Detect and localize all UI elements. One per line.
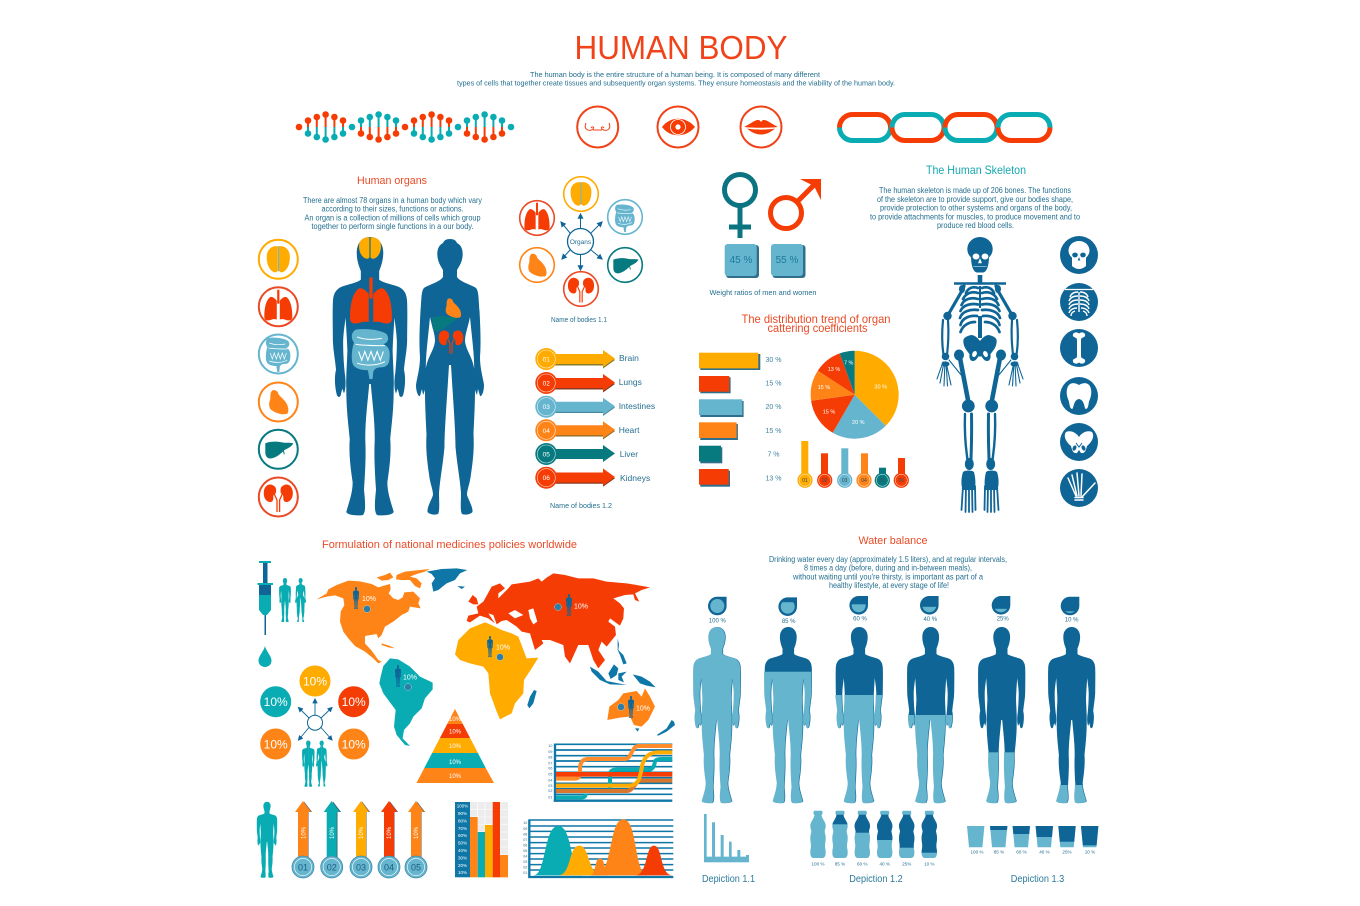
bar percentages: 15 % [766, 428, 781, 435]
icon: lips [740, 106, 782, 148]
radial percentage circles: 10% [264, 738, 288, 752]
water balance description: without waiting until you're thirsty, is important as part of a [792, 572, 984, 582]
depiction 1.2 bottles: 60 % [857, 862, 868, 866]
map marker: asia: 10% [574, 604, 588, 610]
depiction 1.3 cups: 40 % [1039, 850, 1050, 854]
caption: name of bodies 1.2: Name of bodies 1.2 [550, 503, 612, 510]
depiction 1.3 cups: 25% [1062, 850, 1072, 854]
depiction 1.2 bottles: 40 % [879, 862, 890, 866]
depiction 1.3 cups: 60 % [1016, 850, 1027, 854]
skeleton description: The human skeleton is made up of 206 bones. The functions [879, 186, 1071, 195]
depiction 1.3 cups [967, 826, 1099, 854]
organs description: according to their sizes, functions or actions. [322, 205, 464, 214]
intro text: The human body is the entire structure of a human being. It is composed of many different [530, 70, 821, 79]
female figure with organs [416, 239, 484, 515]
map marker: africa [487, 636, 510, 660]
standing teal figure [257, 802, 277, 878]
pyramid chart: 10% [449, 760, 462, 766]
thermometer bars [797, 441, 909, 488]
teal people pair [279, 578, 306, 622]
radial percentage circles: 10% [303, 674, 327, 688]
bar percentages: 7 % [767, 452, 780, 458]
stream line chart: 09 [548, 750, 552, 754]
water drop indicators: 85 % [782, 619, 796, 625]
water balance description: Drinking water every day (approximately 1.5 liters), and at regular intervals, [769, 555, 1007, 564]
stream line chart: 02 [548, 789, 552, 793]
pie chart: 7 % [844, 360, 854, 366]
heading: the human skeleton: The Human Skeleton [926, 163, 1026, 177]
stream line chart: 04 [548, 778, 552, 782]
radial percentage circles: 10% [342, 695, 366, 709]
map marker: australia: 10% [636, 706, 650, 712]
pyramid chart: 10% [449, 744, 462, 750]
stream line chart: 07 [548, 761, 552, 765]
eurasia, africa and oceania [455, 573, 675, 736]
bar percentages: 30 % [766, 357, 781, 364]
mountain area chart: 02 [523, 866, 527, 870]
arrow list of organs: 02 [543, 380, 550, 388]
icon: pelvis [1060, 423, 1098, 461]
mountain area chart: 10 [523, 821, 527, 825]
depiction 1.2 label: Depiction 1.2 [849, 874, 903, 885]
water balance description: healthy lifestyle, at every stage of life! [829, 581, 949, 590]
pie chart: 15 % [823, 410, 835, 416]
pie chart: 13 % [828, 367, 840, 373]
percentage bar chart: 80% [458, 818, 467, 823]
box: 55 percent: 55 % [776, 255, 799, 266]
panel: national medicines policies [257, 539, 675, 878]
arrow list of organs: Intestines [619, 401, 655, 411]
depiction 1.2 bottles: 85 % [835, 862, 845, 866]
skeleton icons column [1060, 236, 1098, 507]
icon: rib cage [1060, 283, 1098, 321]
thermometer bars: 04 [861, 478, 867, 484]
north america [317, 568, 467, 663]
mountain area chart: 09 [523, 827, 527, 831]
panel: human organs [259, 175, 484, 516]
male figure with organs [333, 237, 407, 515]
mountain area chart [523, 819, 673, 877]
percentage bar chart: 30% [458, 855, 467, 860]
arrow list of organs: 01 [543, 356, 550, 364]
heading: human organs: Human organs [357, 175, 427, 187]
organs description [303, 196, 482, 231]
stream line chart: 05 [548, 773, 552, 777]
bar percentages: 13 % [766, 476, 781, 482]
upward arrows chart: 10% [387, 826, 393, 839]
water drop indicators [708, 596, 1079, 625]
intro text: types of cells that together create tissues and subsequently organ systems. They ensure homeostasis and the viability of the human body. [457, 78, 895, 88]
depiction 1.2 bottles: 100 % [811, 862, 825, 866]
icon: hand bones [1060, 469, 1098, 507]
stream line chart: 01 [548, 795, 552, 799]
pie chart: 20 % [852, 420, 865, 426]
bar percentages [766, 357, 781, 482]
bar percentages: 15 % [766, 380, 781, 388]
skeleton description: provide protection to other systems and organs of the body, [880, 204, 1072, 212]
water drop indicators: 40 % [923, 617, 938, 623]
depiction 1.2 bottles: 10 % [924, 862, 935, 866]
icon: syringe [258, 561, 273, 635]
upward arrows chart: 10% [359, 826, 365, 839]
organs description: There are almost 78 organs in a human body which vary [303, 196, 482, 205]
thermometer bars: 05 [880, 478, 885, 484]
percentage bar chart: 40% [458, 848, 467, 853]
map marker: africa: 10% [496, 644, 510, 652]
pie chart: 15 % [818, 385, 830, 391]
mountain area chart: 03 [523, 860, 527, 864]
thermometer bars: 06 [899, 478, 904, 484]
south america [379, 658, 433, 746]
depiction 1.3 label: Depiction 1.3 [1011, 874, 1065, 885]
depiction 1.2 bottles [810, 811, 938, 866]
map marker: south america: 10% [403, 674, 417, 682]
body water figures [687, 627, 1101, 807]
water drop indicators: 60 % [853, 616, 867, 622]
water balance description [769, 555, 1007, 590]
skeleton description: to provide attachments for muscles, to produce movement and to [870, 212, 1080, 221]
arrow list of organs: Brain [619, 353, 639, 363]
thermometer bars: 03 [842, 478, 848, 484]
water drop indicators: 10 % [1065, 618, 1079, 624]
mountain area chart: 04 [523, 855, 527, 859]
water drop indicators: 100 % [709, 618, 726, 624]
bar percentages: 20 % [766, 404, 781, 411]
radial percentage circles [260, 666, 369, 787]
panel: water balance [687, 535, 1101, 885]
icon: tooth [1060, 377, 1098, 415]
skeleton description: produce red blood cells. [937, 221, 1014, 230]
heading: formulation: Formulation of national medicines policies worldwide [322, 539, 577, 551]
map marker: south america [395, 665, 417, 690]
icon: skull [1060, 236, 1098, 274]
icon: female symbol [724, 174, 756, 238]
radial organs diagram [520, 177, 642, 306]
upward arrows chart: 03 [356, 862, 366, 872]
percentage bar chart: 50% [458, 841, 467, 846]
mountain area chart: 05 [523, 849, 527, 853]
stream line chart: 08 [548, 756, 552, 760]
gender symbols and weight ratios [710, 174, 821, 297]
skeleton description [870, 186, 1080, 230]
world map [317, 568, 675, 746]
icon: eye [658, 106, 698, 148]
map marker: australia [618, 696, 650, 718]
heading: distribution trend: The distribution trend of organ [742, 312, 890, 326]
percentage bar chart: 70% [458, 826, 467, 831]
depiction 1.3 cups: 100 % [970, 850, 984, 854]
mountain area chart: 06 [523, 844, 527, 848]
panel: human skeleton [870, 163, 1098, 512]
caption: weight ratios: Weight ratios of men and women [710, 288, 816, 297]
radial percentage circles: 10% [342, 738, 366, 752]
intro text [457, 70, 895, 88]
arrow list of organs: 06 [543, 475, 550, 482]
upward arrows chart: 10% [302, 826, 308, 839]
stream line chart: 10 [548, 744, 552, 748]
map marker: asia [555, 594, 588, 616]
arrow list of organs: 03 [543, 404, 550, 411]
arrow list of organs: 05 [543, 452, 550, 458]
depiction 1.3 cups: 85 % [994, 850, 1004, 854]
upward arrows chart: 10% [330, 826, 336, 839]
upward arrows chart: 04 [384, 862, 394, 872]
icon column: organs [259, 240, 298, 516]
upward arrows chart: 02 [327, 862, 337, 872]
percentage bar chart: 100% [457, 804, 468, 808]
percentage bar chart: 90% [458, 811, 467, 816]
water drop indicators: 25% [997, 616, 1009, 622]
heading: distribution trend: cattering coefficients [768, 321, 868, 335]
pyramid chart: 10% [449, 774, 462, 780]
mountain area chart: 08 [523, 832, 527, 836]
mountain area chart: 01 [523, 871, 527, 875]
pyramid chart: 10% [449, 717, 462, 723]
depiction 1.1 chart [704, 814, 749, 862]
percentage bar chart: 60% [458, 833, 467, 838]
map marker: north america: 10% [362, 596, 376, 603]
heading: water balance: Water balance [858, 535, 928, 547]
arrow list of organs: Kidneys [620, 473, 650, 483]
icon: nose [577, 106, 618, 148]
stream line chart [548, 744, 672, 802]
horizontal bars [699, 353, 760, 487]
chain [840, 114, 1050, 140]
stream line chart: 06 [548, 767, 552, 771]
organs description: together to perform single functions in a our body. [312, 222, 474, 231]
percentage bar chart: 20% [458, 863, 467, 868]
icon: water drop [258, 646, 272, 667]
pyramid chart: 10% [449, 730, 462, 736]
upward arrows chart: 05 [411, 862, 421, 872]
thermometer bars: 01 [802, 478, 808, 484]
percentage bar chart [455, 802, 508, 877]
arrow list of organs: Lungs [619, 377, 642, 387]
arrow list of organs: 04 [543, 428, 550, 435]
pie chart: 30 % [874, 384, 887, 390]
icon: bone [1060, 329, 1098, 367]
upward arrows chart: 10% [414, 826, 420, 839]
icon: male symbol [770, 179, 821, 228]
arrow list of organs: Liver [620, 449, 638, 459]
box: 45 percent: 45 % [730, 255, 753, 266]
percentage bar chart: 10% [458, 870, 467, 875]
arrow list of organs [535, 348, 655, 489]
depiction 1.1 label: Depiction 1.1 [702, 874, 755, 885]
upward arrows chart: 01 [298, 862, 308, 872]
heading: distribution trend [742, 312, 890, 335]
panel: distribution trend [699, 312, 909, 488]
organs description: An organ is a collection of millions of cells which group [304, 213, 481, 222]
pyramid chart [416, 709, 494, 783]
title: HUMAN BODY [574, 29, 788, 66]
map marker: north america [353, 587, 376, 612]
upward arrows chart [292, 801, 427, 878]
dna helix [296, 111, 514, 143]
radial organs diagram: Organs [570, 239, 592, 246]
radial percentage circles: 10% [264, 695, 288, 709]
water balance description: 8 times a day (before, during and in-between meals), [804, 564, 972, 573]
stream line chart: 03 [548, 784, 552, 788]
depiction 1.3 cups: 10 % [1085, 850, 1095, 854]
pie chart [811, 351, 899, 439]
mountain area chart: 07 [523, 838, 527, 842]
thermometer bars: 02 [822, 478, 828, 484]
skeleton figure [937, 237, 1023, 512]
skeleton description: of the skeleton are to provide support, give our bodies shape, [877, 195, 1073, 204]
caption: name of bodies 1.1: Name of bodies 1.1 [551, 317, 607, 324]
arrow list of organs: Heart [619, 425, 640, 435]
depiction 1.2 bottles: 25% [902, 862, 911, 866]
